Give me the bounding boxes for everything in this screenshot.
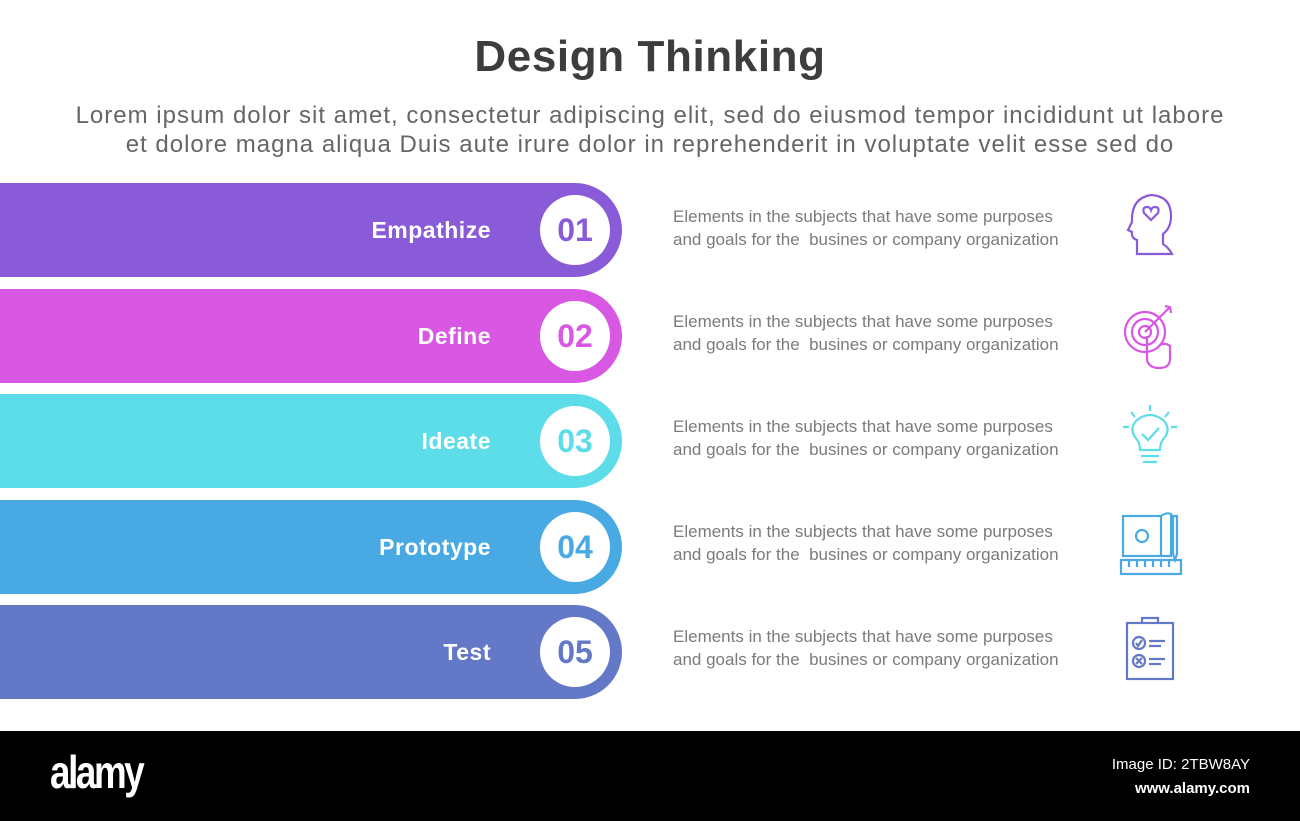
text: test: and goals for the busines or company organization xyxy=(673,650,1059,668)
bar: empathize: Empathize xyxy=(371,217,491,243)
subtitle: et dolore magna aliqua Duis aute irure dolor in reprehenderit in voluptate velit esse sed do xyxy=(126,131,1174,158)
text: prototype xyxy=(673,522,1059,564)
text: empathize xyxy=(673,207,1059,248)
bar: prototype: 04 xyxy=(557,529,593,565)
bar: prototype xyxy=(0,500,622,594)
bar: prototype: Prototype xyxy=(379,534,491,560)
bar: test: Test xyxy=(443,639,491,665)
text: test xyxy=(673,627,1059,668)
bar: ideate: Ideate xyxy=(422,428,491,454)
icon: prototype xyxy=(1120,512,1182,576)
footer info: www.alamy.com xyxy=(1135,780,1250,797)
bar: define: Define xyxy=(418,323,491,349)
text: define xyxy=(673,312,1059,354)
bar: define xyxy=(0,289,622,383)
footer xyxy=(0,731,1300,821)
bar: test xyxy=(0,605,622,699)
subtitle xyxy=(76,102,1224,158)
text: ideate: Elements in the subjects that have some purposes xyxy=(673,417,1053,436)
footer logo: alamy xyxy=(50,746,142,798)
text: ideate: and goals for the busines or company organization xyxy=(673,440,1059,458)
text: ideate xyxy=(673,417,1059,458)
text: empathize: and goals for the busines or company organization xyxy=(673,230,1059,248)
title: Design Thinking xyxy=(474,32,826,81)
icon: clipboard xyxy=(1126,616,1174,680)
text: empathize: Elements in the subjects that have some purposes xyxy=(673,207,1053,226)
icon: target xyxy=(1124,304,1172,370)
bar: empathize: 01 xyxy=(557,212,593,248)
icon: head heart xyxy=(1126,194,1174,256)
text: test: Elements in the subjects that have some purposes xyxy=(673,627,1053,646)
bar: test: 05 xyxy=(557,634,593,670)
text: define: Elements in the subjects that have some purposes xyxy=(673,312,1053,331)
bar: ideate: 03 xyxy=(557,423,593,459)
icon: lightbulb xyxy=(1123,405,1177,464)
subtitle: Lorem ipsum dolor sit amet, consectetur adipiscing elit, sed do eiusmod tempor incididunt ut labore xyxy=(76,102,1224,129)
bar: empathize xyxy=(0,183,622,277)
bar: ideate xyxy=(0,394,622,488)
footer info: Image ID: 2TBW8AY xyxy=(1112,756,1250,773)
text: define: and goals for the busines or company organization xyxy=(673,334,1059,354)
bar: define: 02 xyxy=(557,318,593,354)
text: prototype: Elements in the subjects that have some purposes xyxy=(673,522,1053,541)
text: prototype: and goals for the busines or company organization xyxy=(673,544,1059,564)
footer info xyxy=(1112,756,1250,797)
